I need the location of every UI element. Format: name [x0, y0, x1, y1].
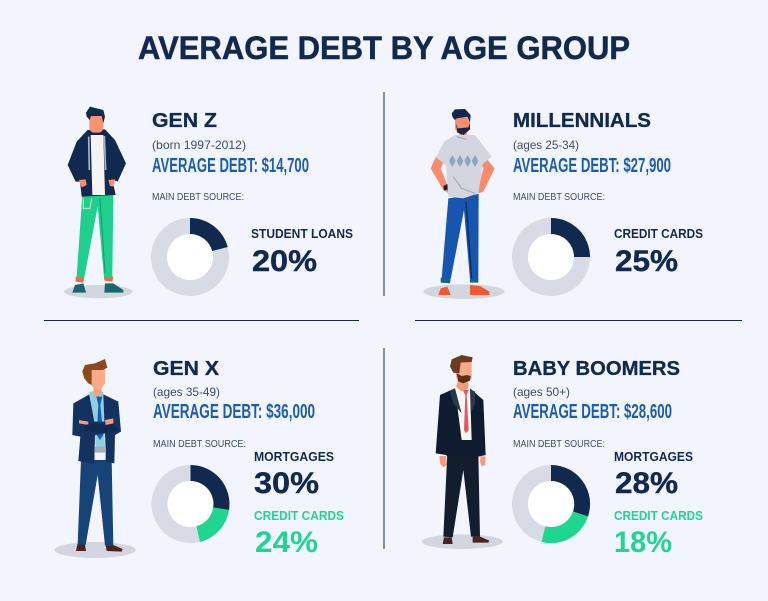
donut chart — [160, 465, 229, 542]
illustration: Gen X man — [54, 359, 136, 558]
average debt: AVERAGE DEBT: $27,900 — [513, 155, 671, 177]
illustration: Gen Z man — [64, 107, 133, 298]
illustration: Millennial man — [423, 109, 505, 299]
panel: Gen X — [54, 358, 344, 559]
source percent: 25% — [615, 245, 678, 278]
source percent: 20% — [252, 245, 317, 278]
average debt: AVERAGE DEBT: $36,000 — [153, 401, 315, 423]
source label: mortgages: MORTGAGES — [614, 449, 693, 464]
debt source label: MAIN DEBT SOURCE: — [153, 439, 246, 450]
debt source label: MAIN DEBT SOURCE: — [513, 439, 605, 450]
heading: GEN Z — [152, 110, 217, 132]
heading: BABY BOOMERS — [513, 358, 680, 380]
heading: GEN X — [153, 358, 220, 380]
percent: mortgages: 30% — [254, 467, 319, 500]
title: AVERAGE DEBT BY AGE GROUP — [138, 30, 630, 66]
panel: Gen Z — [64, 107, 353, 298]
percent: credit cards: 24% — [255, 526, 318, 559]
average debt: AVERAGE DEBT: $28,600 — [513, 401, 672, 423]
age range: (ages 50+) — [513, 385, 570, 399]
panel: Baby Boomers — [422, 355, 703, 559]
source label: mortgages: MORTGAGES — [254, 449, 334, 464]
donut chart — [520, 218, 590, 288]
illustration: Baby Boomer man — [422, 355, 503, 549]
debt source label: MAIN DEBT SOURCE: — [513, 192, 605, 203]
source label: credit cards: CREDIT CARDS — [614, 508, 703, 523]
age range: (ages 25-34) — [513, 138, 579, 152]
donut chart — [159, 218, 228, 288]
source label: STUDENT LOANS — [251, 226, 353, 241]
panel: Millennials — [423, 109, 703, 299]
donut chart — [520, 465, 590, 543]
average debt: AVERAGE DEBT: $14,700 — [152, 155, 309, 177]
source label: credit cards: CREDIT CARDS — [254, 508, 344, 523]
age range: (born 1997-2012) — [152, 138, 246, 152]
debt source label: MAIN DEBT SOURCE: — [152, 192, 244, 203]
heading: MILLENNIALS — [513, 110, 651, 132]
percent: credit cards: 18% — [614, 526, 672, 559]
age range: (ages 35-49) — [153, 385, 220, 399]
source label: CREDIT CARDS — [614, 226, 703, 241]
percent: mortgages: 28% — [615, 467, 678, 500]
